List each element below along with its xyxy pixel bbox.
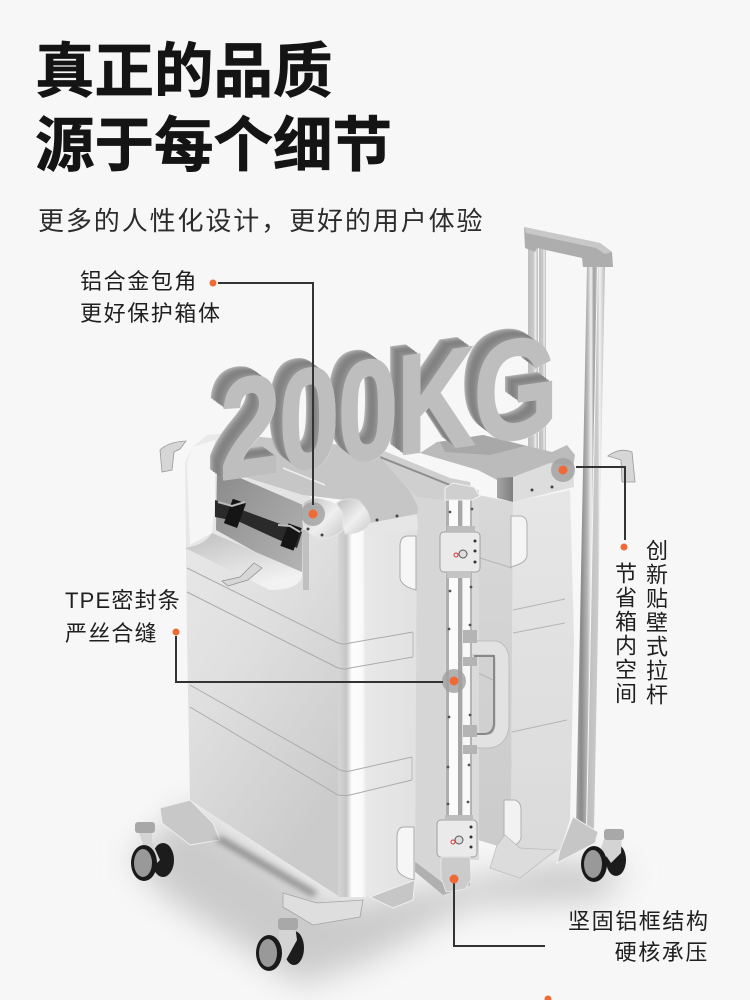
3D text 200KG: 200KG <box>220 305 557 511</box>
label: frame <box>568 909 710 965</box>
side handle upper <box>400 536 416 590</box>
label: seal strip <box>65 588 181 646</box>
wheel front center <box>256 918 304 971</box>
subtitle: 更多的人性化设计，更好的用户体验 <box>38 206 484 236</box>
back suitcase <box>420 435 598 878</box>
corner protector <box>303 498 343 538</box>
bolts <box>376 518 378 522</box>
bottom lock <box>437 815 477 857</box>
corner scallop <box>337 499 370 534</box>
detached corner bracket right <box>608 450 635 482</box>
back side handle upper <box>511 516 527 567</box>
label: corner protector <box>80 269 222 326</box>
frame bolts <box>447 508 473 805</box>
callout seal strip <box>172 628 466 693</box>
label: seal strip: 严丝合缝 <box>65 621 158 646</box>
base shadow edge <box>214 836 318 897</box>
title: 源于每个细节 <box>35 112 392 179</box>
black hinge strip <box>215 499 302 551</box>
title: 真正的品质 <box>35 38 332 105</box>
middle gap and frame <box>353 446 502 895</box>
bottom foot <box>283 893 363 925</box>
label: corner protector: 更好保护箱体 <box>80 301 222 326</box>
carry handle <box>472 648 502 741</box>
label: pull rod sub: 节省箱内空间 <box>612 562 637 706</box>
title <box>35 38 392 179</box>
wheel front left <box>131 822 174 881</box>
back foot <box>557 817 598 863</box>
label: pull rod main: 创新贴壁式拉杆 <box>643 539 668 707</box>
floor shadow <box>130 805 630 985</box>
cut-off marker <box>544 996 552 1000</box>
trolley handle <box>524 227 613 830</box>
detached corner bracket left <box>160 441 186 472</box>
ribs <box>187 568 413 796</box>
flap <box>185 533 302 590</box>
label: corner protector: 铝合金包角 <box>80 269 198 294</box>
label: seal strip: TPE密封条 <box>65 588 181 613</box>
top lock <box>440 526 480 578</box>
front suitcase <box>160 433 418 925</box>
lid cavity <box>216 468 303 578</box>
label: frame: 坚固铝框结构 <box>568 909 710 934</box>
callout pull rod <box>551 458 628 550</box>
label: frame: 硬核承压 <box>615 940 709 965</box>
wheel back right <box>581 829 626 882</box>
left foot <box>160 800 220 845</box>
callout corner protector <box>210 280 325 526</box>
back side handle lower <box>504 800 521 849</box>
top face <box>222 433 418 523</box>
callout frame <box>450 874 545 946</box>
wheels <box>131 822 626 971</box>
left bright strip <box>187 440 215 545</box>
side handle lower <box>397 827 414 880</box>
frame latch foot <box>441 857 471 892</box>
